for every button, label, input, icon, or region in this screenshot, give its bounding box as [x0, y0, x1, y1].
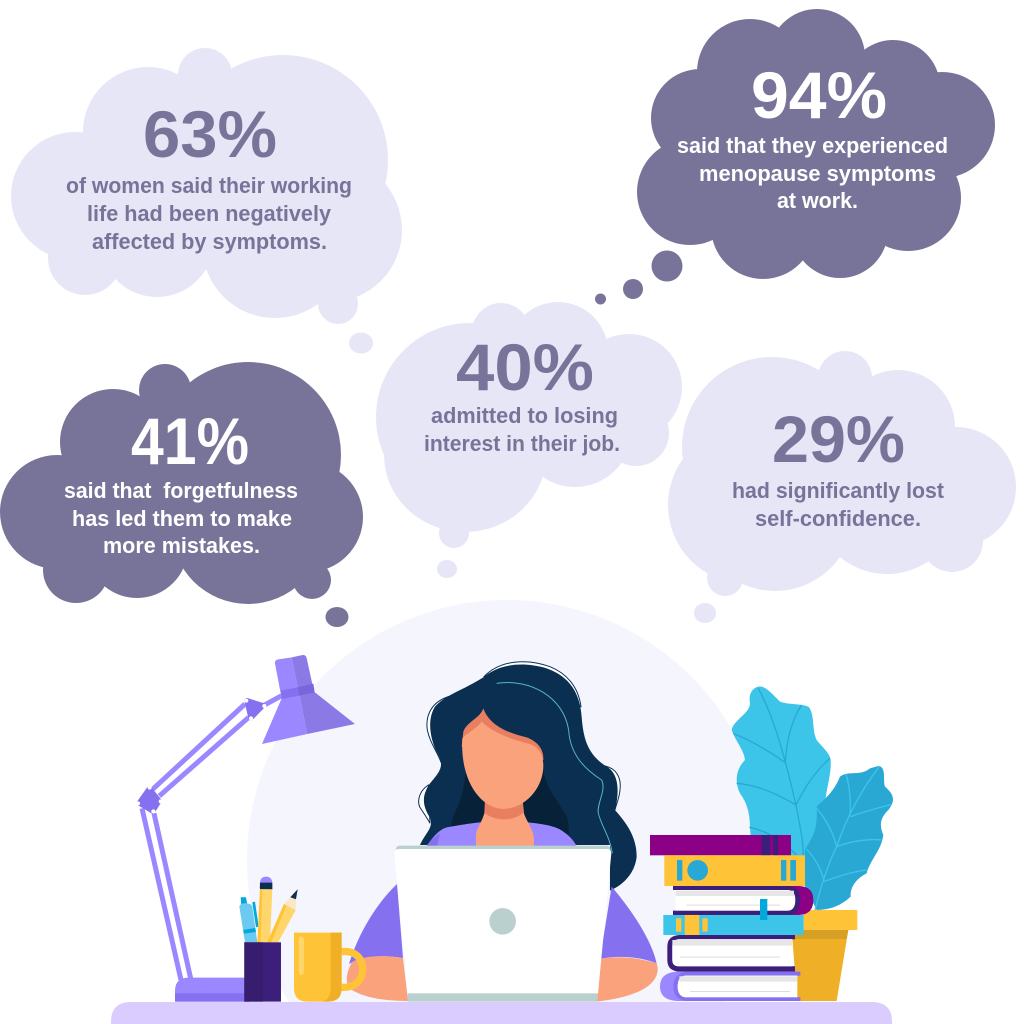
text: 41% description: has led them to make	[72, 506, 292, 531]
shirt	[427, 822, 577, 846]
book: dark cover	[667, 935, 795, 972]
icon: potted plant	[732, 686, 893, 1001]
text: 41% description: said that forgetfulness	[64, 478, 298, 503]
hair strands	[419, 662, 620, 823]
cloud shape: 63%	[11, 48, 402, 354]
text: 94% description	[677, 133, 948, 213]
cloud shape: 40%	[376, 302, 682, 578]
bookmark	[760, 899, 767, 920]
text: 63% description: life had been negatively	[87, 201, 332, 226]
text: 40% description: admitted to losing	[431, 403, 618, 428]
desk	[111, 1002, 892, 1024]
book: yellow	[664, 855, 805, 886]
text: 63% description: affected by symptoms.	[92, 229, 327, 254]
text: 63% description: of women said their working	[66, 173, 352, 198]
face	[462, 708, 543, 760]
panel: 94% thought cloud	[595, 9, 995, 304]
hair highlight	[497, 683, 612, 853]
text: 29% description	[732, 478, 945, 531]
hair	[420, 665, 637, 891]
text: 63% description	[66, 173, 352, 254]
pot	[792, 930, 848, 1001]
panel: 63% thought cloud	[11, 48, 402, 354]
text: 94% description: menopause symptoms	[699, 161, 936, 186]
stat: 63%: 63%	[143, 97, 277, 171]
book: blue	[663, 915, 804, 935]
book: white pages with magenta spine	[673, 886, 813, 915]
book: purple	[650, 835, 791, 855]
stat: 40%: 40%	[456, 330, 594, 404]
text: 40% description	[424, 403, 620, 456]
small leaf	[805, 766, 893, 910]
text: 29% description: self-confidence.	[755, 506, 921, 531]
icon: desk lamp	[136, 655, 355, 1002]
icon: woman at laptop	[394, 662, 658, 1002]
icon: pencil holder	[239, 877, 298, 1002]
left sleeve and hand	[347, 884, 408, 1001]
stat: 29%: 29%	[772, 402, 905, 476]
neck	[476, 800, 534, 846]
text: 94% description: at work.	[777, 188, 858, 213]
icon: stack of books	[650, 835, 813, 1001]
right hand	[597, 957, 658, 1002]
panel: 41% thought cloud	[0, 362, 363, 627]
large leaf	[732, 686, 831, 870]
stat: 94%: 94%	[751, 58, 887, 132]
text: 40% description: interest in their job.	[424, 431, 620, 456]
text: 41% description	[64, 478, 298, 558]
icon: coffee mug	[294, 933, 363, 1002]
right sleeve	[600, 887, 657, 963]
cloud shape: 94%	[595, 9, 995, 304]
book: lilac cover	[660, 972, 800, 1001]
text: 29% description: had significantly lost	[732, 478, 945, 503]
laptop lid	[396, 846, 611, 853]
panel: 29% thought cloud	[668, 351, 1016, 623]
text: 94% description: said that they experienced	[677, 133, 948, 158]
panel: background circle	[247, 600, 767, 1002]
stat: 41%: 41%	[131, 404, 249, 478]
cloud shape: 41%	[0, 362, 363, 627]
cloud shape: 29%	[668, 351, 1016, 623]
panel: 40% thought cloud	[376, 302, 682, 578]
text: 41% description: more mistakes.	[103, 533, 260, 558]
